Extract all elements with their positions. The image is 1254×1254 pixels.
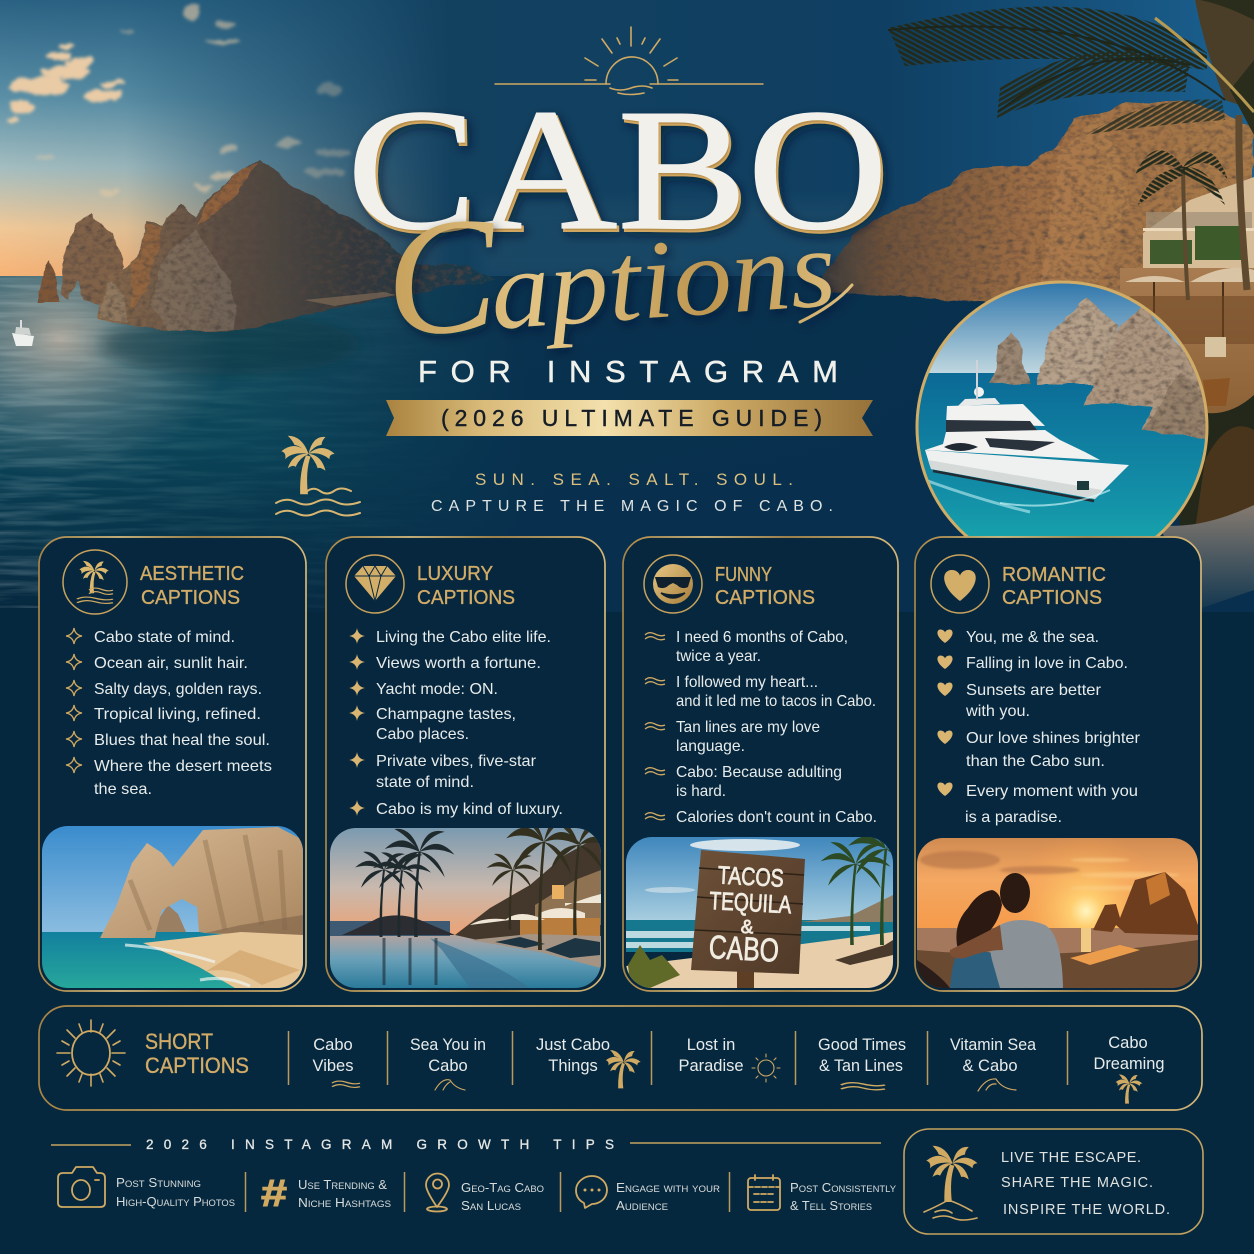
tip: chat bubble xyxy=(576,1176,721,1213)
left rock formation xyxy=(38,159,496,331)
tagline: CAPTURE THE MAGIC OF CABO. xyxy=(431,498,833,515)
caption list: twice a year. xyxy=(676,648,761,665)
caption list xyxy=(937,629,1141,826)
caption list: Calories don't count in Cabo. xyxy=(676,809,877,826)
icon: diamond badge xyxy=(346,555,404,613)
heading xyxy=(140,563,244,609)
tip: hashtag: Use Trending & xyxy=(298,1178,388,1192)
caption list: I followed my heart... xyxy=(676,674,818,691)
caption list: You, me & the sea. xyxy=(966,629,1099,646)
caption list: Sunsets are better xyxy=(966,682,1102,699)
caption list: Cabo state of mind. xyxy=(94,629,235,646)
photo: tacos tequila sign xyxy=(626,837,893,988)
heading: FUNNY xyxy=(715,564,772,586)
slogan: SHARE THE MAGIC. xyxy=(1001,1175,1153,1191)
yacht circular photo xyxy=(916,280,1208,536)
palm tree crown top right xyxy=(888,0,1254,300)
photo: tacos tequila sign: TACOS xyxy=(717,861,784,893)
panel: luxury captions xyxy=(326,537,613,991)
caption list: Cabo places. xyxy=(376,726,469,743)
tip: hashtag: # xyxy=(261,1173,287,1215)
tip: hashtag xyxy=(261,1173,391,1215)
photo: tacos tequila sign: TEQUILA xyxy=(709,887,792,919)
caption list: is hard. xyxy=(676,783,726,800)
caption list: language. xyxy=(676,738,745,755)
photo: resort pool xyxy=(330,828,601,988)
caption list: the sea. xyxy=(94,781,152,798)
caption list xyxy=(66,628,272,798)
caption list: Our love shines brighter xyxy=(966,730,1141,747)
clouds xyxy=(6,3,353,195)
short caption items: Sea You in xyxy=(410,1036,486,1054)
icon: sun xyxy=(57,1020,125,1086)
icon: aesthetic palm badge xyxy=(63,550,127,614)
caption list: Every moment with you xyxy=(966,783,1138,800)
subtitle: for instagram: FOR INSTAGRAM xyxy=(418,354,838,389)
caption list: and it led me to tacos in Cabo. xyxy=(676,693,876,710)
ribbon banner: (2026 ULTIMATE GUIDE) xyxy=(441,405,822,431)
title: CABO: CABO xyxy=(347,73,888,266)
tip: location pin xyxy=(426,1174,544,1213)
caption list: Living the Cabo elite life. xyxy=(376,629,551,646)
short caption items: Cabo xyxy=(1108,1034,1148,1052)
heading xyxy=(1002,564,1106,609)
short caption items: & Tan Lines xyxy=(819,1057,903,1075)
slogan xyxy=(1001,1150,1170,1218)
panel: funny captions xyxy=(623,537,924,991)
caption list: state of mind. xyxy=(376,774,474,791)
sun emblem with divider line xyxy=(495,27,763,94)
caption list: Cabo is my kind of luxury. xyxy=(376,801,563,818)
photo: tacos tequila sign: & xyxy=(740,917,754,938)
caption list: Views worth a fortune. xyxy=(376,655,541,672)
small boat xyxy=(12,320,34,346)
heading xyxy=(145,1029,249,1078)
ribbon banner xyxy=(386,400,873,436)
caption list: Where the desert meets xyxy=(94,758,272,775)
short caption items: Cabo xyxy=(428,1057,468,1075)
heading: AESTHETIC xyxy=(140,563,244,585)
slogan: INSPIRE THE WORLD. xyxy=(1003,1202,1170,1218)
caption list: Champagne tastes, xyxy=(376,706,516,723)
panel: romantic captions xyxy=(915,537,1201,991)
tip: hashtag: Niche Hashtags xyxy=(298,1196,391,1210)
beach strip xyxy=(304,292,396,306)
short caption items: Things xyxy=(548,1057,598,1075)
heading: LUXURY xyxy=(417,563,493,585)
caption list: Tropical living, refined. xyxy=(94,706,261,723)
heading: ROMANTIC xyxy=(1002,564,1106,586)
heading: CAPTIONS xyxy=(1002,587,1102,609)
caption list: Yacht mode: ON. xyxy=(376,681,498,698)
icon: sunglasses smiley badge xyxy=(644,555,702,613)
caption list: Salty days, golden rays. xyxy=(94,681,262,698)
tip: camera: High-Quality Photos xyxy=(116,1195,235,1209)
heading xyxy=(715,564,815,609)
panel: aesthetic captions xyxy=(39,537,306,991)
short caption items: Dreaming xyxy=(1094,1055,1164,1073)
tip: chat bubble: Audience xyxy=(616,1199,668,1213)
growth tips heading: 2026 INSTAGRAM GROWTH TIPS xyxy=(146,1137,614,1152)
tip: camera: Post Stunning xyxy=(116,1176,201,1190)
icon: heart badge xyxy=(931,555,989,613)
caption list: Blues that heal the soul. xyxy=(94,732,270,749)
short caption items: Good Times xyxy=(818,1036,906,1054)
short caption items: Paradise xyxy=(678,1057,744,1075)
icon: palm island xyxy=(924,1146,978,1220)
short caption items: Vitamin Sea xyxy=(950,1036,1037,1054)
caption list: Ocean air, sunlit hair. xyxy=(94,655,248,672)
tagline xyxy=(431,470,833,515)
caption list: I need 6 months of Cabo, xyxy=(676,629,848,646)
tip: location pin: San Lucas xyxy=(461,1199,521,1213)
short caption items: Just Cabo xyxy=(536,1036,610,1054)
panel: short captions strip xyxy=(39,1006,1202,1110)
short caption items: Vibes xyxy=(313,1057,353,1075)
caption list: Private vibes, five-star xyxy=(376,753,537,770)
photo: couple at sunset xyxy=(917,838,1198,988)
heading: SHORT xyxy=(145,1029,213,1054)
hotel and terrace xyxy=(1120,177,1254,612)
caption list xyxy=(645,629,877,826)
photo: arch beach xyxy=(42,826,303,988)
tip: calendar: Post Consistently xyxy=(790,1181,896,1195)
caption list: than the Cabo sun. xyxy=(966,753,1105,770)
heading: CAPTIONS xyxy=(145,1053,249,1078)
short caption items xyxy=(288,1031,1164,1104)
caption list: Cabo: Because adulting xyxy=(676,764,842,781)
short caption items: Cabo xyxy=(313,1036,353,1054)
tip: chat bubble: Engage with your xyxy=(616,1181,721,1195)
tagline: SUN. SEA. SALT. SOUL. xyxy=(475,470,793,489)
growth tips row xyxy=(58,1167,896,1215)
caption list: is a paradise. xyxy=(965,809,1062,826)
short caption items: & Cabo xyxy=(962,1057,1018,1075)
heading xyxy=(417,563,515,609)
slogan: LIVE THE ESCAPE. xyxy=(1001,1150,1141,1166)
caption list: Falling in love in Cabo. xyxy=(966,655,1128,672)
title: CABO: CABO xyxy=(349,76,890,269)
panel: live the escape xyxy=(904,1129,1203,1234)
heading: CAPTIONS xyxy=(715,587,815,609)
tip: location pin: Geo-Tag Cabo xyxy=(461,1181,544,1195)
photo: tacos tequila sign: CABO xyxy=(708,928,780,969)
short caption items: Lost in xyxy=(687,1036,735,1054)
tip: calendar xyxy=(748,1175,896,1213)
tip: camera xyxy=(58,1167,235,1209)
heading: CAPTIONS xyxy=(417,587,515,609)
tip: calendar: & Tell Stories xyxy=(790,1199,872,1213)
heading: CAPTIONS xyxy=(141,587,240,609)
caption list: with you. xyxy=(965,703,1030,720)
hero sky and sea scene xyxy=(0,0,1254,612)
caption list: Tan lines are my love xyxy=(676,719,820,736)
right cliff xyxy=(815,101,1254,340)
title: Captions script: Captions xyxy=(379,158,840,372)
icon: palm and waves xyxy=(276,436,360,516)
caption list xyxy=(349,628,563,818)
